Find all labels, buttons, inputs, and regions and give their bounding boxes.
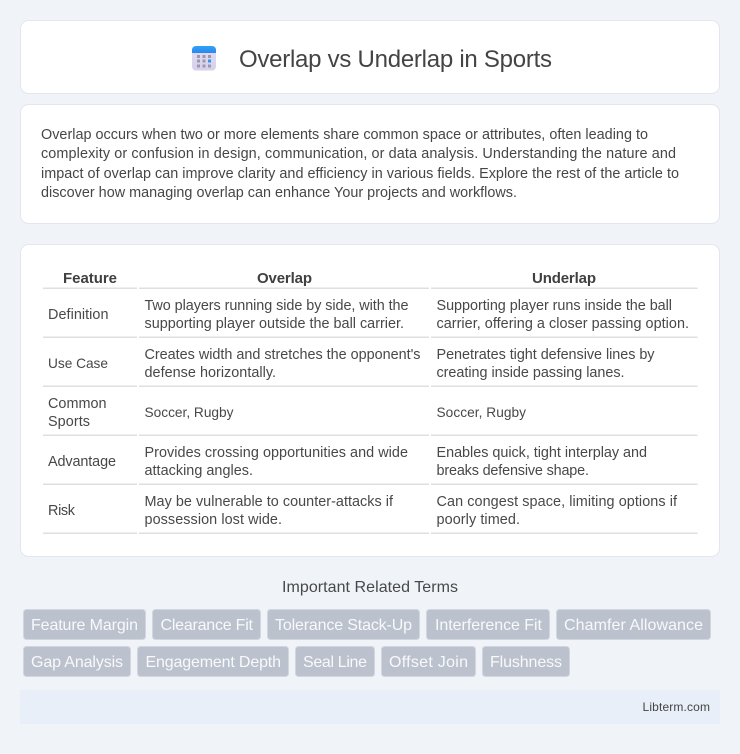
- tag: gap analysis: [24, 646, 130, 676]
- row: use case: Penetrates tight defensive lines by: [436, 347, 655, 363]
- row: advantage: breaks defensive shape.: [436, 463, 589, 479]
- intro text: complexity or confusion in design, communication, or data analysis. Understanding the nature and: [41, 146, 676, 162]
- related term tags: [24, 610, 710, 676]
- tag: interference fit: [426, 610, 550, 640]
- tag: flushness: Flushness: [490, 654, 562, 671]
- row: advantage: Enables quick, tight interplay and: [436, 445, 647, 461]
- tag: tolerance stack-up: [268, 610, 420, 640]
- row: common sports: Common: [48, 396, 106, 412]
- footer credit: Libterm.com: [642, 700, 710, 714]
- tag: gap analysis: Gap Analysis: [31, 654, 123, 671]
- heading: important related terms: Important Related Terms: [282, 579, 458, 596]
- row: definition: supporting player outside the ball carrier.: [144, 316, 404, 332]
- row: use case: creating inside passing lanes.: [436, 365, 624, 381]
- row: advantage: Advantage: [48, 454, 116, 470]
- row: risk: May be vulnerable to counter-attacks if: [144, 494, 394, 510]
- tag: chamfer allowance: Chamfer Allowance: [564, 617, 703, 634]
- row: risk: poorly timed.: [436, 512, 520, 528]
- tag: offset join: Offset Join: [389, 654, 468, 671]
- panel: header: [20, 20, 720, 94]
- table header row: Overlap: [257, 270, 312, 287]
- intro text: discover how managing overlap can enhance Your projects and workflows.: [41, 185, 517, 201]
- row: use case: [48, 347, 655, 381]
- tag: clearance fit: Clearance Fit: [160, 617, 254, 634]
- table header row: Underlap: [532, 270, 596, 287]
- row: risk: Risk: [48, 503, 76, 519]
- tag: flushness: [482, 646, 570, 676]
- row: definition: [48, 298, 689, 332]
- tag: clearance fit: [152, 610, 260, 640]
- intro text: impact of overlap can improve clarity and efficiency in various fields. Explore the rest of the article to: [41, 166, 679, 182]
- row: definition: carrier, offering a closer passing option.: [436, 316, 689, 332]
- row: definition: Definition: [48, 307, 108, 323]
- table header row: Feature: [63, 270, 117, 287]
- row: use case: defense horizontally.: [144, 365, 276, 381]
- tag: interference fit: Interference Fit: [435, 617, 543, 634]
- row: common sports: [48, 396, 526, 430]
- row: risk: [48, 494, 678, 528]
- row: advantage: Provides crossing opportunities and wide: [144, 445, 408, 461]
- tag: seal line: [296, 646, 374, 676]
- row: common sports: Sports: [48, 414, 90, 430]
- row: advantage: attacking angles.: [144, 463, 253, 479]
- panel: comparison table: [20, 244, 720, 556]
- panel: introduction: [20, 104, 720, 224]
- tag: offset join: [382, 646, 476, 676]
- title: Overlap vs Underlap in Sports: [239, 46, 552, 73]
- row: common sports: Soccer, Rugby: [144, 405, 234, 420]
- icon: calendar: [192, 46, 216, 70]
- intro text: Overlap occurs when two or more elements share common space or attributes, often leading to: [41, 127, 648, 143]
- tag: engagement depth: Engagement Depth: [146, 654, 281, 671]
- row: definition: Supporting player runs inside the ball: [436, 298, 672, 314]
- row: risk: possession lost wide.: [144, 512, 282, 528]
- row: definition: Two players running side by side, with the: [144, 298, 408, 314]
- tag: chamfer allowance: [556, 610, 710, 640]
- tag: feature margin: [24, 610, 146, 640]
- row: common sports: Soccer, Rugby: [436, 405, 526, 420]
- tag: tolerance stack-up: Tolerance Stack-Up: [275, 617, 412, 634]
- row: use case: Use Case: [48, 356, 108, 371]
- row: risk: Can congest space, limiting options if: [436, 494, 678, 510]
- tag: seal line: Seal Line: [303, 654, 367, 671]
- footer bar: [20, 690, 720, 724]
- row: use case: Creates width and stretches the opponent's: [144, 347, 420, 363]
- tag: feature margin: Feature Margin: [31, 617, 138, 634]
- intro text: [41, 127, 679, 201]
- row: advantage: [48, 445, 647, 479]
- table header row: [63, 270, 596, 287]
- tag: engagement depth: [138, 646, 288, 676]
